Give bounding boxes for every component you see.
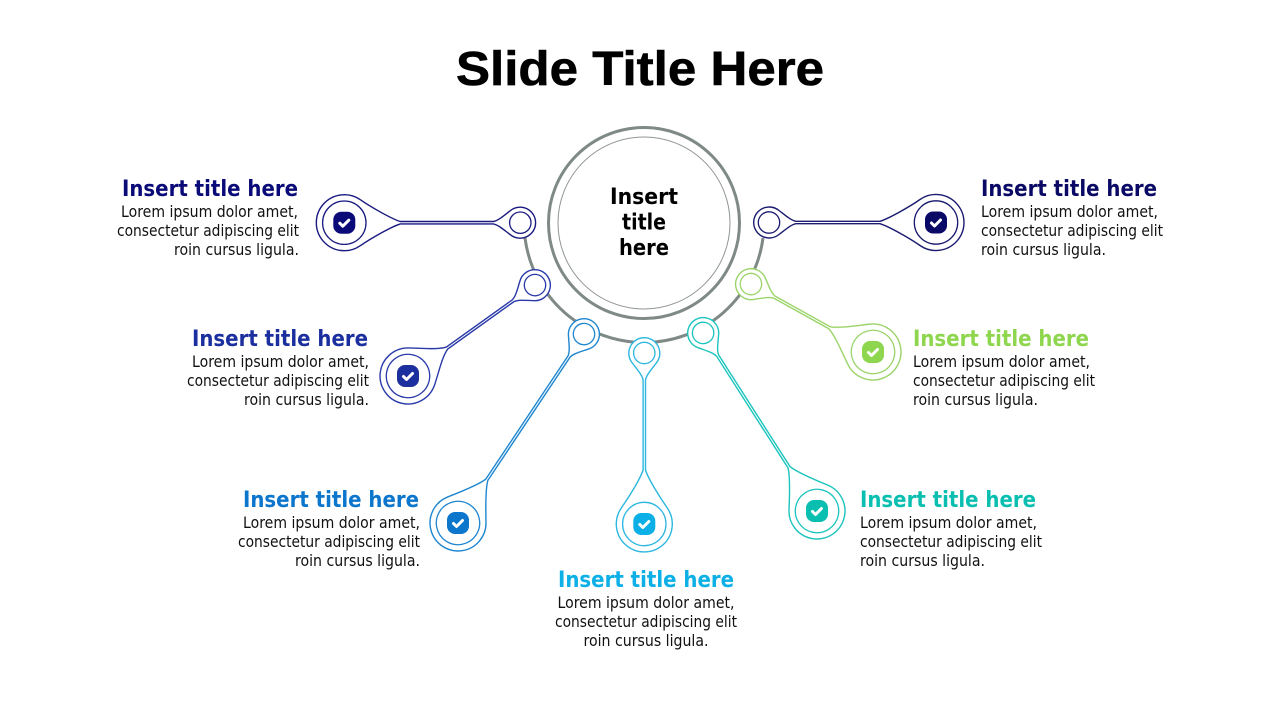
item title: Insert title here <box>122 177 298 202</box>
item text: roin cursus ligula. <box>244 390 369 409</box>
title: Slide Title Here <box>456 43 824 96</box>
icon: check <box>447 512 469 534</box>
item text: Lorem ipsum dolor amet, <box>981 202 1158 221</box>
item title: Insert title here <box>192 327 368 352</box>
icon: check <box>633 513 655 535</box>
icon: check <box>333 212 355 234</box>
icon: check <box>862 341 884 363</box>
connector <box>369 253 564 415</box>
connector <box>419 306 616 562</box>
item: bottom center <box>555 338 737 650</box>
item: lower right <box>671 305 1042 570</box>
item text: roin cursus ligula. <box>584 631 708 650</box>
connecting arc <box>525 238 763 343</box>
connector <box>616 338 672 552</box>
item title: Insert title here <box>860 488 1036 513</box>
item text: consectetur adipiscing elit <box>981 221 1163 240</box>
item text: roin cursus ligula. <box>295 551 420 570</box>
item: middle left <box>187 253 564 415</box>
connector <box>316 195 536 251</box>
hub label: title <box>622 210 666 236</box>
item text: Lorem ipsum dolor amet, <box>243 513 420 532</box>
hub label: Insert <box>610 185 678 210</box>
item text: consectetur adipiscing elit <box>238 532 420 551</box>
item text: roin cursus ligula. <box>981 240 1106 259</box>
item text: roin cursus ligula. <box>860 551 985 570</box>
hub outer ring <box>548 128 740 318</box>
item text: Lorem ipsum dolor amet, <box>860 513 1037 532</box>
item text: consectetur adipiscing elit <box>555 612 737 631</box>
center hub <box>525 128 763 343</box>
connector <box>754 194 964 250</box>
item title: Insert title here <box>558 568 734 593</box>
item text: roin cursus ligula. <box>174 240 299 259</box>
item: top right <box>754 177 1163 259</box>
item title: Insert title here <box>981 177 1157 202</box>
item title: Insert title here <box>913 327 1089 352</box>
item: lower left <box>238 306 616 570</box>
item text: consectetur adipiscing elit <box>187 371 369 390</box>
hub label: here <box>619 236 669 261</box>
item text: Lorem ipsum dolor amet, <box>913 352 1090 371</box>
item text: consectetur adipiscing elit <box>117 221 299 240</box>
item text: Lorem ipsum dolor amet, <box>121 202 298 221</box>
item: top left <box>117 177 536 259</box>
item text: consectetur adipiscing elit <box>860 532 1042 551</box>
item text: roin cursus ligula. <box>913 390 1038 409</box>
item text: Lorem ipsum dolor amet, <box>192 352 369 371</box>
icon: check <box>925 212 947 234</box>
hub inner ring <box>558 137 730 309</box>
item: middle right <box>724 252 1095 409</box>
icon: check <box>806 500 828 522</box>
connector <box>724 252 911 390</box>
icon: check <box>397 365 419 387</box>
item title: Insert title here <box>243 488 419 513</box>
item text: consectetur adipiscing elit <box>913 371 1095 390</box>
item text: Lorem ipsum dolor amet, <box>558 593 734 612</box>
connector <box>671 305 856 550</box>
